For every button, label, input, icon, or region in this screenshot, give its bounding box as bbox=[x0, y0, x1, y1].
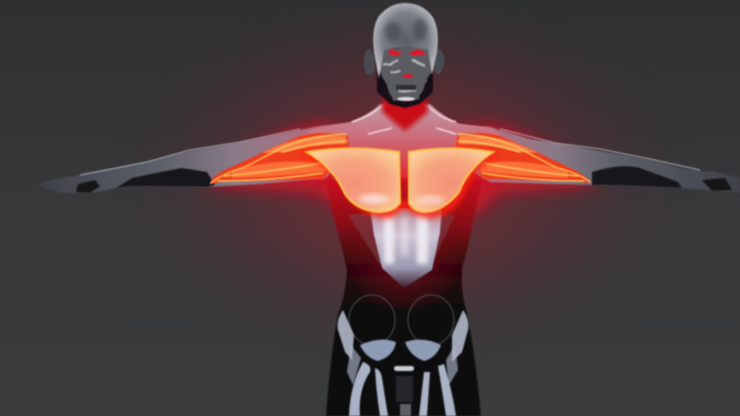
jaw bbox=[377, 72, 433, 108]
outer arm glow bbox=[205, 124, 596, 222]
right shoulder and arm muscle bbox=[456, 133, 590, 183]
hips and legs detail bbox=[338, 295, 468, 416]
cranium bbox=[373, 3, 438, 78]
glow around pectorals bbox=[307, 152, 493, 214]
right pectoral bbox=[409, 148, 493, 212]
outer hip highlights bbox=[338, 310, 468, 362]
abdominals bbox=[348, 208, 455, 296]
left pectoral sheen bbox=[359, 194, 389, 204]
left arm bbox=[37, 122, 352, 193]
right hand shadow bbox=[702, 178, 732, 191]
left shoulder and arm muscle bbox=[210, 133, 349, 184]
hip rings bbox=[349, 295, 454, 345]
abs highlights bbox=[384, 214, 428, 264]
eyes bbox=[388, 49, 427, 78]
chest highlights bbox=[352, 106, 456, 134]
facial highlights bbox=[384, 60, 425, 92]
left muscle fibres bbox=[211, 134, 347, 183]
right muscle fibres bbox=[458, 134, 590, 182]
right arm bbox=[456, 124, 740, 193]
left pectoral bbox=[307, 148, 400, 212]
right arm highlight bbox=[500, 129, 700, 170]
neck bbox=[382, 94, 428, 131]
head bbox=[364, 3, 444, 131]
skull texture bbox=[385, 19, 427, 42]
mouth bbox=[397, 97, 415, 101]
left hand shadow bbox=[76, 180, 100, 193]
left arm highlight bbox=[80, 129, 300, 175]
thigh streaks bbox=[347, 345, 458, 416]
face bbox=[378, 48, 432, 100]
right forearm shadow bbox=[592, 166, 682, 188]
groin wedges bbox=[360, 340, 441, 361]
abdominal centre line bbox=[403, 266, 405, 296]
mid-torso red tint bbox=[346, 210, 462, 310]
ears bbox=[364, 49, 444, 75]
right pectoral sheen bbox=[416, 195, 444, 205]
torso and legs bbox=[326, 180, 482, 416]
left forearm shadow bbox=[116, 168, 215, 188]
upper chest and shoulders bbox=[285, 104, 515, 178]
